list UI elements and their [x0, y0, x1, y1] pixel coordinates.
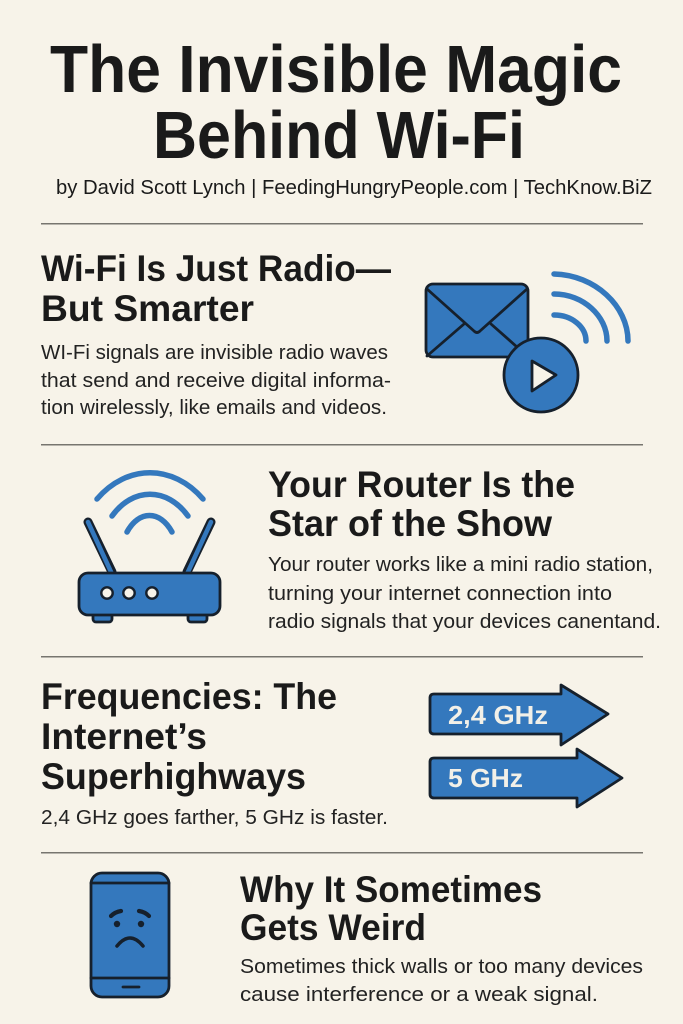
body text: Your router works like a mini radio station, [268, 553, 653, 576]
body text: radio signals that your devices canentand. [268, 610, 661, 633]
icon: envelope, play button and waves [426, 274, 628, 412]
heading: Star of the Show [268, 503, 552, 544]
heading: Frequencies: The [41, 676, 337, 717]
body text: cause interference or a weak signal. [240, 983, 598, 1006]
title [50, 32, 622, 173]
arrow: 5 GHz [430, 749, 622, 807]
heading: Gets Weird [240, 907, 426, 948]
heading: Why It Sometimes [240, 869, 542, 910]
heading [41, 248, 391, 329]
arrow: 2,4 GHz [430, 685, 608, 745]
panel: Wi-Fi is radio [41, 248, 628, 419]
body text: that send and receive digital informa- [41, 369, 391, 392]
heading [268, 464, 575, 544]
heading: Wi-Fi Is Just Radio— [41, 248, 391, 289]
title: Behind Wi-Fi [153, 98, 525, 173]
title: The Invisible Magic [50, 32, 622, 107]
heading [41, 676, 337, 797]
body text [268, 553, 661, 633]
arrow: 2,4 GHz: 2,4 GHz [448, 700, 548, 730]
body text: turning your internet connection into [268, 582, 612, 605]
body text [41, 341, 391, 419]
heading: But Smarter [41, 288, 254, 329]
panel: frequencies [41, 676, 622, 829]
heading: Internet’s [41, 716, 207, 757]
heading: Superhighways [41, 756, 306, 797]
heading [240, 869, 542, 948]
icon: sad phone [91, 873, 169, 997]
body text [240, 955, 643, 1006]
heading: Your Router Is the [268, 464, 575, 505]
body text: 2,4 GHz goes farther, 5 GHz is faster. [41, 806, 388, 829]
body text: Sometimes thick walls or too many devices [240, 955, 643, 978]
body text: tion wirelessly, like emails and videos. [41, 396, 387, 419]
body text: WI-Fi signals are invisible radio waves [41, 341, 388, 364]
panel: why it gets weird [91, 869, 643, 1006]
byline: by David Scott Lynch | FeedingHungryPeople.com | TechKnow.BiZ [56, 177, 652, 199]
icon: router [79, 473, 220, 622]
arrow: 5 GHz: 5 GHz [448, 763, 523, 793]
panel: router [79, 464, 661, 633]
